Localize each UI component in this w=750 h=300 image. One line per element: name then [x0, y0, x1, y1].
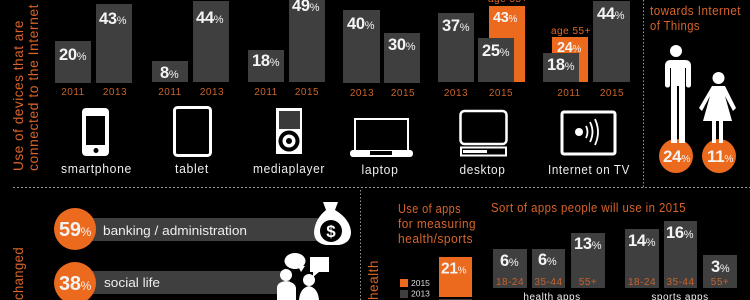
icon: internet on TV	[562, 112, 615, 154]
chart: health apps: 13%	[574, 235, 602, 253]
chart: smartphone: 20%	[59, 46, 87, 64]
heading: towards Internet of Things: of Things	[650, 18, 700, 33]
bar: banking / administration	[54, 208, 325, 250]
bar: social life: 38%	[59, 273, 92, 295]
icon: woman with 11%	[699, 72, 736, 173]
icon: mediaplayer	[276, 108, 302, 154]
chart: sports apps: 14%	[628, 232, 656, 250]
bar: banking / administration: banking / administration	[103, 223, 247, 238]
chart: internet on TV	[543, 1, 630, 99]
chart: laptop: 40%	[347, 15, 375, 33]
chart: internet on TV: 18%	[547, 56, 575, 74]
icon: woman with 11%: 11%	[707, 147, 733, 166]
device labels: mediaplayer	[253, 161, 325, 176]
legend: 2013	[411, 288, 430, 298]
chart: health apps: 6%	[538, 251, 557, 269]
chart: mediaplayer: 2011	[254, 87, 278, 98]
chart: tablet: 2011	[158, 87, 182, 98]
icon: desktop	[460, 111, 506, 156]
heading: towards Internet of Things: towards Internet	[650, 3, 741, 18]
heading: use of devices	[10, 4, 41, 171]
heading: health: health	[365, 260, 381, 300]
legend	[400, 278, 430, 298]
icon: smartphone	[82, 108, 109, 156]
icon: money bag	[314, 202, 351, 245]
icon: money bag: $	[326, 222, 336, 241]
chart: health apps: 6%	[500, 252, 519, 270]
bar: social life	[54, 262, 290, 300]
chart: use of apps	[439, 257, 472, 300]
heading: use of apps	[398, 201, 476, 246]
chart: sports apps: 55+	[711, 277, 729, 288]
chart: sports apps: 3%	[711, 258, 730, 276]
chart: laptop: 30%	[388, 36, 416, 54]
device labels	[61, 161, 630, 177]
chart: laptop: 2015	[391, 88, 415, 99]
icon: tablet	[174, 108, 210, 156]
device labels: desktop	[460, 162, 506, 177]
chart: tablet: 44%	[196, 9, 224, 27]
bar: banking / administration: 59%	[59, 219, 92, 241]
device labels: laptop	[362, 162, 398, 177]
chart: desktop: 37%	[442, 17, 470, 35]
chart: health apps	[493, 233, 605, 300]
heading: towards Internet of Things	[650, 3, 741, 33]
chart: tablet: 2013	[200, 87, 224, 98]
chart: mediaplayer: 18%	[252, 52, 280, 70]
heading: use of devices: Use of devices that are	[10, 20, 26, 171]
chart: desktop	[438, 0, 528, 99]
chart: health apps: 55+	[579, 277, 597, 288]
chart: smartphone	[55, 4, 132, 98]
chart: mediaplayer: 2015	[295, 87, 319, 98]
chart: health apps: 18-24	[496, 277, 524, 288]
chart: smartphone: 43%	[99, 10, 127, 28]
device labels: Internet on TV	[548, 162, 630, 177]
icon: laptop	[350, 119, 413, 157]
chart: mediaplayer	[248, 0, 325, 98]
device labels: smartphone	[61, 161, 132, 176]
chart: sports apps	[625, 221, 737, 300]
heading: use of devices: connected to the Internet	[25, 4, 41, 171]
chart: desktop: 2013	[444, 88, 468, 99]
heading: use of apps: for measuring	[398, 216, 476, 231]
icon: man with 24%	[659, 45, 693, 173]
chart: laptop: 2013	[350, 88, 374, 99]
chart: tablet: 8%	[160, 64, 179, 82]
icon: man with 24%: 24%	[663, 147, 690, 166]
chart: use of apps: 21%	[441, 260, 467, 278]
chart: tablet	[152, 1, 229, 98]
heading: use of apps: health/sports	[398, 231, 473, 246]
bar: social life: social life	[104, 275, 160, 290]
chart: desktop: 25%	[482, 42, 510, 60]
chart: internet on TV: 24%	[557, 40, 582, 56]
chart: sports apps: 16%	[666, 224, 694, 242]
chart: health apps: 35-44	[534, 277, 563, 288]
chart: internet on TV: 2015	[600, 88, 624, 99]
heading: use of apps: Use of apps	[398, 201, 461, 216]
legend: 2015	[411, 278, 430, 288]
chart: laptop	[343, 10, 420, 99]
chart: internet on TV: 44%	[597, 5, 625, 23]
chart: desktop: 2015	[489, 88, 513, 99]
heading: sort of apps: Sort of apps people will use in 2015	[491, 200, 686, 215]
icon: people talking	[277, 253, 329, 300]
chart: internet on TV: 2011	[557, 88, 581, 99]
heading: changed: changed	[10, 247, 26, 300]
chart: sports apps: 35-44	[666, 277, 695, 288]
chart: desktop: 43%	[493, 10, 518, 26]
chart: sports apps: 18-24	[628, 277, 656, 288]
device labels: tablet	[175, 161, 209, 176]
chart: smartphone: 2013	[103, 87, 127, 98]
chart: internet on TV: age 55+	[551, 26, 591, 37]
chart: smartphone: 2011	[61, 87, 85, 98]
